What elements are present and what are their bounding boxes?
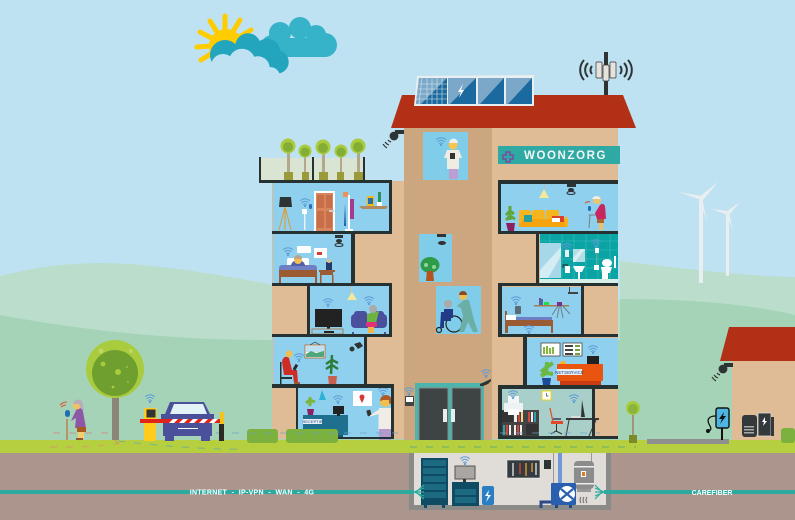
sun [197, 16, 251, 63]
intercom [404, 388, 414, 406]
panel: roof terrace [259, 138, 366, 182]
floor and wall lines: left wing [259, 180, 394, 439]
camera: entrance [480, 370, 491, 386]
panel: reception: RECEPTIE [302, 419, 323, 424]
panel: right lounge [501, 184, 618, 231]
far hills [0, 261, 795, 445]
fiber line left [0, 485, 424, 499]
panel: reception [298, 388, 392, 442]
panel: service desk: NETSERVICE [555, 370, 584, 375]
fiber line left: INTERNET - IP-VPN - WAN - 4G [190, 490, 315, 496]
window: nurse [423, 132, 468, 180]
camera: corridor left [335, 235, 343, 246]
tool board [507, 460, 540, 478]
pavement [647, 439, 729, 444]
camera: roof [383, 130, 404, 148]
near hills [0, 299, 795, 445]
home batteries [742, 413, 774, 437]
building right wing [492, 128, 618, 439]
ev charger [706, 408, 729, 440]
cloud front [205, 33, 289, 87]
car [161, 402, 214, 441]
fuse box [544, 460, 551, 469]
floor and wall lines: right wing [498, 180, 618, 439]
grass [0, 440, 795, 453]
monitor cabinet [452, 466, 479, 506]
panel: right bedroom [502, 287, 581, 334]
panel: basement [409, 453, 611, 510]
building left wing [272, 181, 404, 439]
parking barrier post [144, 395, 156, 441]
barrier arm [140, 412, 224, 441]
panel: living room with seated man [273, 337, 364, 385]
panel: living room [310, 286, 389, 334]
camera: lounge right [567, 184, 576, 194]
window: wheelchair [436, 286, 481, 334]
server rack left [421, 458, 448, 508]
central tower [404, 128, 492, 441]
battery [482, 486, 494, 505]
signal dashes [50, 433, 636, 449]
fiber line right [595, 485, 795, 499]
panel: service desk [527, 338, 618, 385]
small tree [626, 401, 640, 443]
tree [86, 340, 144, 440]
solar panels [414, 75, 534, 106]
sign: woonzorg [498, 146, 620, 164]
neighbouring house [720, 327, 795, 441]
window: plant [419, 234, 452, 282]
cloud back [261, 17, 337, 57]
soil [0, 453, 795, 520]
camera: parlour [350, 342, 363, 352]
panel: office [500, 389, 599, 436]
antenna mast [580, 52, 632, 95]
entrance doors [415, 383, 484, 441]
boiler [574, 461, 594, 503]
wifi [460, 457, 470, 465]
elderly woman with cane [60, 399, 86, 440]
pipes [541, 453, 592, 508]
hedges [247, 428, 795, 443]
sign: woonzorg: WOONZORG [524, 150, 607, 162]
panel: bathroom [540, 234, 618, 283]
heat pump [551, 483, 576, 508]
roof [391, 95, 636, 128]
panel: hallway room [273, 183, 389, 231]
camera: house [712, 363, 733, 381]
panel: bedroom [273, 234, 351, 283]
fiber line right: CAREFIBER [692, 490, 732, 497]
wind turbines [679, 182, 740, 283]
